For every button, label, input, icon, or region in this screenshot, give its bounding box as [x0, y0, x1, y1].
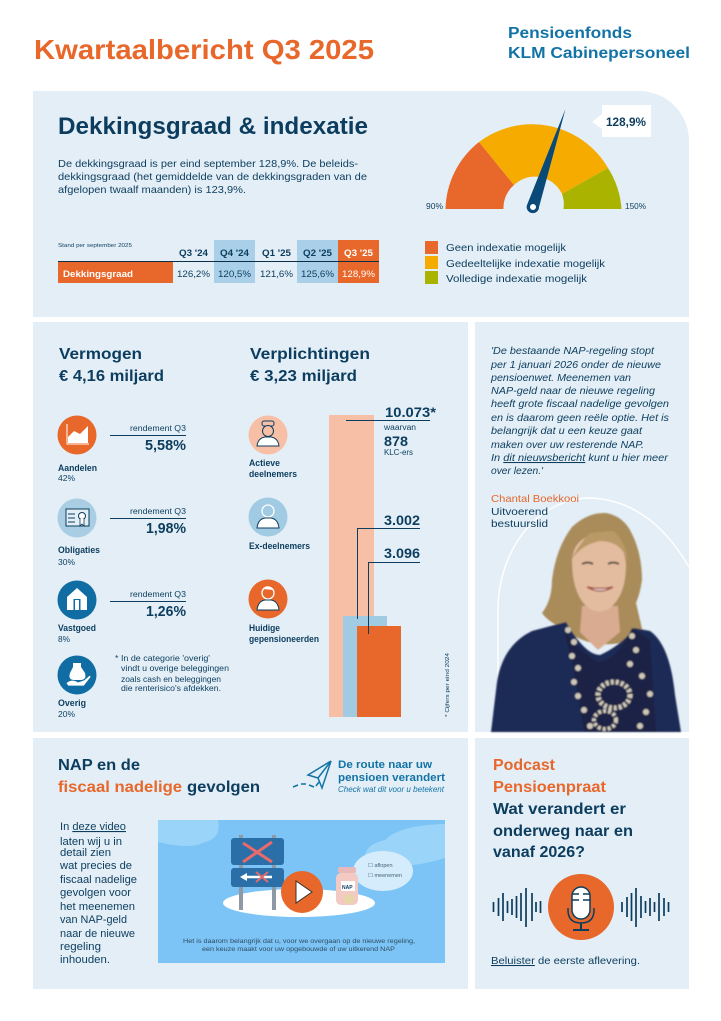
callout: 128,9% [592, 105, 651, 137]
chart: deelnemers staven: waarvan [383, 423, 416, 432]
icon: actieve deelnemers [248, 416, 288, 454]
panel: podcast pensioenpraat [475, 738, 689, 989]
footnote: cijfers per eind 2024: * Cijfers per eind 2024 [445, 653, 451, 717]
footnote: categorie overig: vindt u overige beleggingen [121, 664, 229, 673]
footnote: categorie overig: zoals cash en beleggingen [121, 675, 221, 684]
footnote: categorie overig: die renterisico's afdekken. [121, 684, 221, 693]
callout: de route naar uw pensioen verandert: Check wat dit voor u betekent [338, 785, 445, 794]
label: actieve deelnemers: Actieve [249, 458, 280, 468]
logo: Pensioenfonds KLM Cabinepersoneel [508, 25, 690, 62]
text block: video toelichting: inhouden. [60, 954, 110, 966]
rendement obligaties: 1,98% [146, 520, 186, 537]
text block: citaat: heeft grote fiscaal nadelige gevolgen [491, 398, 669, 410]
heading: verplichtingen: Verplichtingen [250, 346, 370, 363]
logo: Pensioenfonds KLM Cabinepersoneel: Pensioenfonds [508, 25, 632, 42]
footnote: categorie overig: * In de categorie 'overig' [115, 654, 211, 663]
text block: video toelichting: regeling [60, 941, 101, 953]
panel: vermogen en verplichtingen [33, 322, 468, 732]
table: dekkingsgraad per kwartaal: 120,5% [218, 269, 252, 280]
label: actieve deelnemers: deelnemers [249, 469, 297, 479]
rendement obligaties: rendement Q3 [130, 506, 186, 516]
video thumbnail [158, 820, 445, 963]
rendement aandelen [110, 423, 186, 454]
label: overig: 20% [58, 710, 75, 719]
chart: gauge dekkingsgraad: 150% [625, 202, 646, 211]
text block: citaat: per 1 januari 2026 onder de nieuwe [490, 359, 661, 371]
jar [336, 867, 358, 905]
chart: gauge dekkingsgraad: 90% [426, 202, 443, 211]
label: ex-deelnemers: Ex-deelnemers [249, 541, 310, 551]
label: huidige gepensioneerden: Huidige [249, 623, 280, 633]
text block: beluister: Beluister de eerste aflevering. [491, 955, 640, 967]
rendement obligaties [110, 506, 186, 537]
text block: citaat: 'De bestaande NAP-regeling stopt [491, 345, 655, 357]
label: vastgoed: Vastgoed [58, 623, 96, 633]
text block: dekkingsgraad toelichting: afgelopen twaalf maanden) is 123,9%. [58, 184, 246, 196]
text block: naam en functie: bestuurslid [491, 518, 548, 530]
label: aandelen: Aandelen [58, 463, 97, 473]
legend: indexatie: Volledige indexatie mogelijk [446, 273, 588, 285]
legend: indexatie [425, 241, 606, 285]
chart: deelnemers staven: 3.002 [384, 512, 420, 528]
icon: microfoon [548, 874, 614, 940]
legend: indexatie: Gedeeltelijke indexatie mogelijk [446, 258, 606, 270]
label: overig [58, 698, 86, 719]
table: dekkingsgraad per kwartaal: Q3 '24 [179, 248, 209, 259]
text block: citaat: In dit nieuwsbericht kunt u hier meer [491, 452, 669, 464]
heading: podcast: Podcast [493, 757, 556, 774]
callout: de route naar uw pensioen verandert [338, 759, 445, 794]
legend: indexatie: Geen indexatie mogelijk [446, 242, 567, 254]
heading: dekkingsgraad: Dekkingsgraad & indexatie [58, 113, 368, 140]
photo: Chantal Boekkooi [491, 513, 681, 732]
video thumbnail: ☐ meenemen [368, 872, 402, 879]
table: dekkingsgraad per kwartaal: 126,2% [177, 269, 211, 280]
text block: citaat: belangrijk dat u een keuze gaat [491, 425, 643, 437]
label: vastgoed: 8% [58, 635, 70, 644]
label: vastgoed [58, 623, 96, 644]
text block: video toelichting: fiscaal nadelige [60, 874, 137, 886]
label: aandelen [58, 463, 97, 483]
sign [231, 835, 284, 910]
heading: podcast: vanaf 2026? [493, 844, 585, 861]
callout: de route naar uw pensioen verandert: pensioen verandert [338, 772, 445, 784]
table: dekkingsgraad per kwartaal: 125,6% [301, 269, 335, 280]
label: actieve deelnemers [249, 458, 297, 479]
chart: deelnemers staven [329, 404, 437, 717]
heading: NAP: gevolgen [187, 779, 260, 796]
heading: verplichtingen: € 3,23 miljard [250, 368, 357, 385]
table: dekkingsgraad per kwartaal: Q4 '24 [220, 248, 250, 259]
callout: de route naar uw pensioen verandert: De route naar uw [338, 759, 432, 771]
play button [281, 871, 323, 913]
text block: citaat: over lezen.' [491, 465, 544, 477]
text block: video toelichting: In deze video [60, 821, 126, 833]
text block: citaat: pensioenwet. Meenemen van [490, 372, 631, 384]
rendement vastgoed: rendement Q3 [130, 589, 186, 599]
table: dekkingsgraad per kwartaal: 121,6% [260, 269, 294, 280]
logo: Pensioenfonds KLM Cabinepersoneel: KLM Cabinepersoneel [508, 45, 690, 62]
icon: aandelen [58, 416, 96, 454]
table: dekkingsgraad per kwartaal: Stand per september 2025 [58, 243, 132, 249]
text block: naam en functie: Uitvoerend [491, 506, 548, 518]
table: dekkingsgraad per kwartaal: Q1 '25 [262, 248, 292, 259]
icon: obligaties [58, 498, 96, 538]
video thumbnail: een keuze maakt voor uw opgebouwde of uw uitkerend NAP [202, 946, 395, 953]
icon: geluidsgolven links [494, 888, 540, 927]
text block: video toelichting: het meenemen [60, 901, 135, 913]
text block: citaat: maken over uw resterende NAP. [491, 439, 644, 451]
text block: citaat: NAP-geld naar de nieuwe regeling [491, 385, 655, 397]
chart: deelnemers staven: 3.096 [384, 545, 420, 561]
text block: naam en functie [491, 493, 579, 530]
text block: dekkingsgraad toelichting [58, 158, 367, 196]
table: dekkingsgraad per kwartaal: Dekkingsgraad [63, 269, 133, 280]
text block: dekkingsgraad toelichting: dekkingsgraad (het gemiddelde van de dekkingsgraden van de [58, 171, 367, 183]
jar: NAP [342, 885, 353, 891]
text block: video toelichting: wat precies de [59, 860, 132, 872]
footnote: categorie overig [115, 654, 229, 693]
table: dekkingsgraad per kwartaal: Q3 '25 [344, 248, 374, 259]
text block: video toelichting: laten wij u in [60, 836, 122, 848]
heading: vermogen: € 4,16 miljard [59, 368, 164, 385]
label: obligaties: 30% [58, 558, 75, 567]
text block: citaat [490, 345, 670, 477]
rendement aandelen: 5,58% [145, 437, 186, 454]
title: Kwartaalbericht Q3 2025 [34, 34, 374, 65]
heading: podcast: onderweg naar en [493, 823, 633, 840]
label: obligaties: Obligaties [58, 545, 100, 555]
chart: deelnemers staven: 878 [384, 433, 408, 449]
text block: naam en functie: Chantal Boekkooi [491, 493, 579, 505]
label: aandelen: 42% [58, 474, 75, 483]
chart: gauge dekkingsgraad [426, 105, 651, 213]
heading: podcast [493, 757, 633, 861]
text block: video toelichting: gevolgen voor [60, 887, 131, 899]
label: huidige gepensioneerden: gepensioneerden [249, 634, 319, 644]
icon: geluidsgolven rechts [622, 888, 668, 927]
heading: NAP [58, 757, 260, 796]
chart: deelnemers staven: KLC-ers [384, 448, 413, 457]
heading: vermogen: Vermogen [59, 346, 142, 363]
label: overig: Overig [58, 698, 86, 708]
panel: NAP en fiscaal nadelige gevolgen [33, 738, 468, 989]
icon: ex-deelnemers [248, 498, 288, 536]
table: dekkingsgraad per kwartaal: Q2 '25 [303, 248, 333, 259]
rendement vastgoed [110, 589, 186, 620]
heading: podcast: Wat verandert er [493, 801, 626, 818]
heading: vermogen [59, 346, 164, 385]
rendement aandelen: rendement Q3 [130, 423, 186, 433]
rendement vastgoed: 1,26% [146, 603, 186, 620]
table: dekkingsgraad per kwartaal [58, 240, 379, 283]
label: obligaties [58, 545, 100, 567]
heading: podcast: Pensioenpraat [493, 779, 607, 796]
text block: video toelichting: van NAP-geld [60, 914, 127, 926]
text block: video toelichting: detail zien [60, 847, 111, 859]
panel: dekkingsgraad en indexatie [33, 91, 689, 317]
label: huidige gepensioneerden [249, 623, 319, 644]
panel: citaat bestuurslid [475, 322, 689, 732]
table: dekkingsgraad per kwartaal: 128,9% [342, 269, 376, 280]
icon: vastgoed [58, 580, 96, 620]
text block: video toelichting [59, 821, 137, 966]
text block: dekkingsgraad toelichting: De dekkingsgraad is per eind september 128,9%. De beleids- [58, 158, 359, 170]
icon: papieren vliegtuig [293, 761, 331, 788]
icon: overig [58, 656, 96, 694]
video thumbnail: ☐ aflopen [368, 862, 393, 869]
icon: huidige gepensioneerden [248, 580, 288, 618]
callout: 128,9%: 128,9% [606, 117, 646, 129]
text block: video toelichting: naar de nieuwe [60, 928, 135, 940]
text block: citaat: en is daarom geen reële optie. Het is [491, 412, 670, 424]
heading: NAP: NAP en de [58, 757, 140, 774]
heading: NAP: fiscaal nadelige [58, 779, 182, 796]
heading: verplichtingen [250, 346, 370, 385]
video thumbnail: Het is daarom belangrijk dat u, voor we overgaan op de nieuwe regeling, [183, 938, 415, 945]
chart: deelnemers staven: 10.073* [385, 404, 437, 420]
